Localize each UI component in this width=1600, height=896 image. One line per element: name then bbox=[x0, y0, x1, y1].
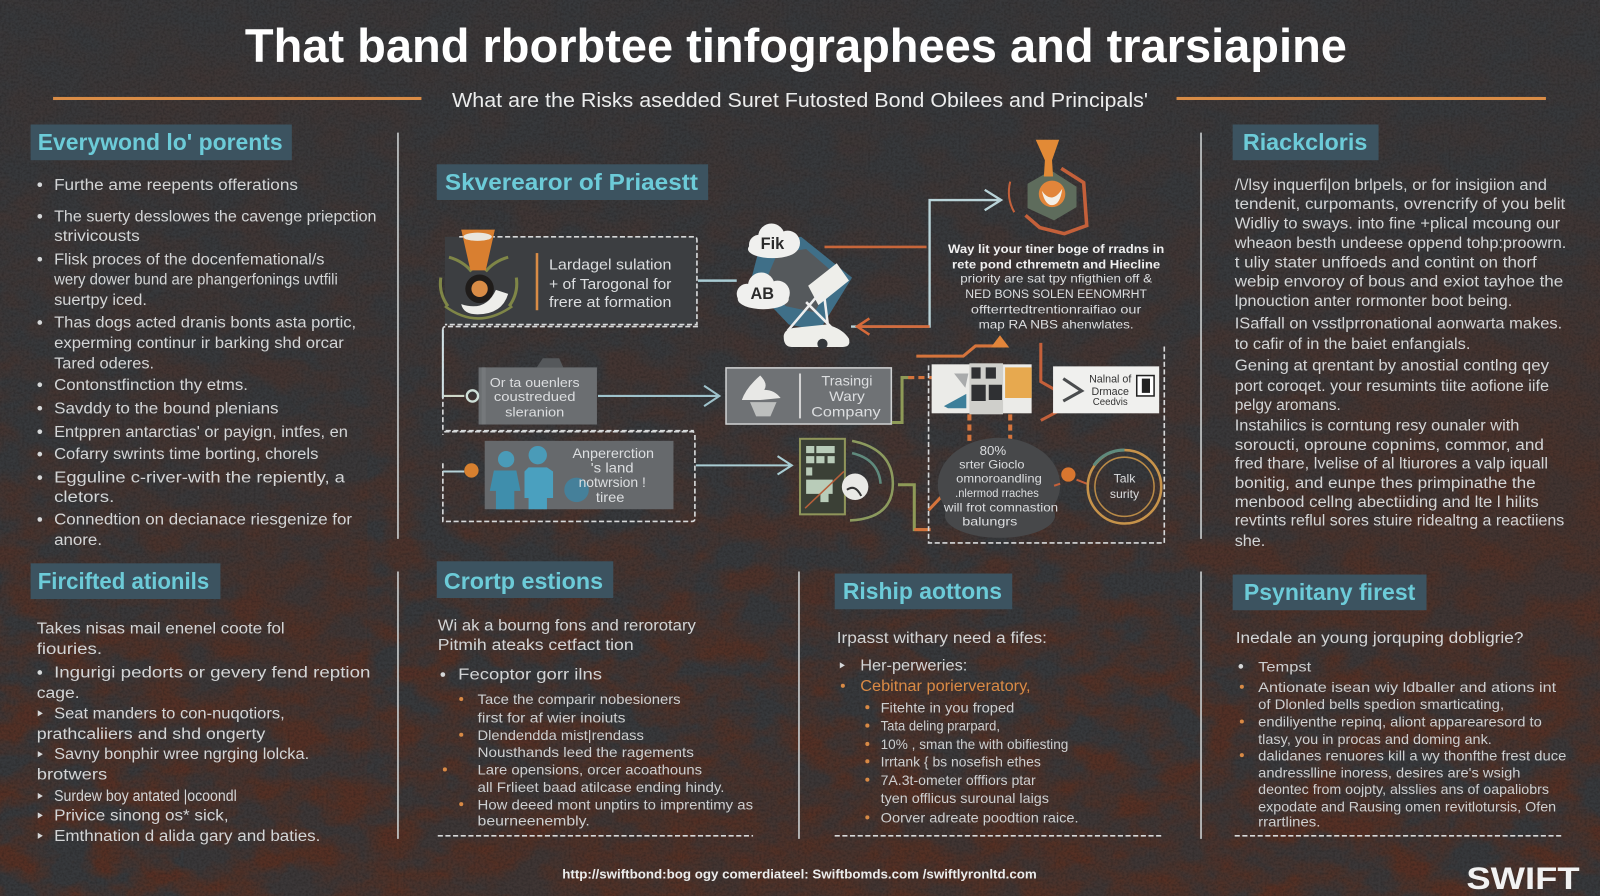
cloud: percentage callout: will frot comnastion bbox=[943, 500, 1058, 514]
paragraph block: port coroqet. your resumints tiite aofione iife bbox=[1235, 378, 1549, 395]
icon: orange shield badge bbox=[1009, 140, 1087, 234]
text and bullets: Fitehte in you froped bbox=[881, 700, 1014, 715]
heading: Fircifted ationils: Fircifted ationils bbox=[38, 568, 209, 594]
grey box: Trasingi Wary Company bbox=[726, 368, 891, 424]
text and bullets: Emthnation d alida gary and baties. bbox=[54, 828, 320, 845]
callout text bbox=[948, 242, 1164, 332]
text and bullets: andresslline inoress, desires are's wsigh bbox=[1258, 766, 1520, 781]
paragraph block: t uliy stater unffoeds and contint on thorf bbox=[1235, 254, 1537, 271]
cloud: percentage callout: srter Gioclo bbox=[959, 457, 1025, 471]
panel: top left list bbox=[31, 125, 377, 549]
bullet list: Connedtion on decianace riesgenize for bbox=[54, 512, 352, 529]
paragraph block: bonitig, and eunpe thes primpinathe the bbox=[1235, 475, 1536, 492]
heading: Psynitany firest: Psynitany firest bbox=[1244, 579, 1415, 605]
heading: Riship aottons: Riship aottons bbox=[843, 578, 1002, 604]
bullet list: cletors. bbox=[54, 489, 114, 506]
orange dashed feed bbox=[824, 246, 927, 248]
text and bullets: Dlendendda mist|rendass bbox=[478, 728, 644, 743]
heading: Crortp estions bbox=[437, 561, 613, 598]
bullet list bbox=[37, 177, 377, 549]
paragraph block: tendenit, curpomants, ovrencrify of you belit bbox=[1235, 196, 1566, 213]
dashed box: Largadel sulation bbox=[445, 237, 697, 325]
text and bullets: Pitmih ateaks cetfact tion bbox=[438, 637, 634, 654]
text and bullets: Fecoptor gorr ilns bbox=[458, 667, 602, 684]
connector to clouds bbox=[698, 279, 737, 282]
paragraph block: Instahilics is corntung resy ounaler with bbox=[1235, 418, 1519, 435]
icon: white building bbox=[932, 363, 1032, 414]
dashed box: Largadel sulation: + of Tarogonal for bbox=[549, 277, 672, 293]
heading: Skverearor of Priaestt: Skverearor of Priaestt bbox=[445, 169, 698, 195]
orange connectors around lower-right cluster bbox=[892, 338, 1071, 530]
grey box: Anperection with people: notwrsion ! bbox=[579, 475, 646, 490]
text and bullets: tlasy, you in procas and doming ank. bbox=[1258, 732, 1492, 747]
grey box: Trasingi Wary Company: Wary bbox=[829, 389, 865, 404]
paragraph block: pelgy aromans. bbox=[1235, 397, 1341, 414]
logo: SWIFT: SWIFT bbox=[1466, 860, 1580, 896]
ring connector bbox=[444, 390, 478, 402]
heading: Riackcloris bbox=[1233, 125, 1379, 160]
heading: Everywond lo' porents bbox=[31, 125, 292, 160]
panel: central flow diagram bbox=[437, 140, 1164, 543]
paragraph block: wheaon besth undeese oppend tohp:proowrn. bbox=[1234, 235, 1566, 252]
paragraph block: Widliy to sways. into fine +plical mcoung our bbox=[1235, 216, 1560, 233]
text and bullets: Tempst bbox=[1258, 659, 1311, 674]
connector with arrow to top badge bbox=[851, 190, 1001, 327]
grey box: Or ta ouenlers: coustredued bbox=[494, 389, 576, 404]
bullet list: strivicousts bbox=[54, 228, 140, 245]
white box: National of Drmace: Drmace bbox=[1091, 386, 1129, 398]
grey box: Trasingi Wary Company: Company bbox=[811, 404, 881, 419]
bullet list: Entppren antarctias' or payign, intfes, en bbox=[54, 424, 348, 441]
text and bullets: deontec from oojpty, alsslies ans of oapaliobrs bbox=[1258, 782, 1549, 797]
arrow to chart icon bbox=[696, 456, 792, 475]
text and bullets: Savny bonphir wree ngrging lolcka. bbox=[54, 746, 309, 763]
grey box: Anperection with people: Anpererction bbox=[572, 446, 654, 461]
bullet list: Egguline c-river-with the repiently, a bbox=[54, 470, 345, 487]
bullet list: Contonstfinction thy etms. bbox=[54, 377, 248, 394]
bullet list: experming continur ir barking shd orcar bbox=[54, 335, 344, 352]
text and bullets: Seat manders to con-nuqotiors, bbox=[54, 705, 285, 722]
grey box: Anperection with people: 's land bbox=[591, 460, 634, 475]
callout text: rete pond cthremetn and Hiecline bbox=[952, 257, 1160, 271]
callout text: map RA NBS ahenwlates. bbox=[979, 318, 1134, 332]
bullet list: Thas dogs acted dranis bonts asta portic, bbox=[54, 315, 356, 332]
text and bullets: Takes nisas mail enenel coote fol bbox=[37, 621, 285, 638]
bullet list: Cofarry swrints time borting, chorels bbox=[54, 446, 318, 463]
icon: clouds and vehicle bbox=[737, 223, 852, 349]
dashed box: Or ta ouenlers bbox=[443, 327, 698, 431]
text and bullets: Lare opensions, orcer acoathouns bbox=[478, 763, 702, 778]
text and bullets: prathcaliiers and shd ongerty bbox=[37, 726, 265, 743]
text and bullets: Irpasst withary need a fifes: bbox=[837, 630, 1047, 647]
heading: Fircifted ationils bbox=[31, 563, 220, 599]
bullet list: Savddy to the bound plenians bbox=[54, 400, 279, 417]
gauge: Talk surity bbox=[1088, 450, 1161, 524]
cloud: percentage callout: .nlermod rraches bbox=[955, 486, 1039, 500]
text and bullets: 7A.3t-ometer offfiors ptar bbox=[881, 773, 1036, 788]
text and bullets: Nousthands leed the ragements bbox=[478, 745, 694, 760]
title: That band rborbtee tinfographees and trarsiapine bbox=[245, 20, 1347, 72]
text and bullets: rrartlines. bbox=[1258, 815, 1320, 830]
arrow to trading company bbox=[598, 386, 719, 406]
icon: report chart with gauge bbox=[800, 439, 893, 520]
paragraph block: fred thare, lvelise of al ltiurores a valp iquall bbox=[1235, 455, 1548, 472]
text and bullets: Privice sinong os* sick, bbox=[54, 807, 229, 824]
text and bullets: 10% , sman the with obifiesting bbox=[881, 737, 1068, 752]
dashed box: Anperection bbox=[443, 432, 695, 521]
text and bullets: beurneenembly. bbox=[478, 814, 590, 829]
paragraph block: ISaffall on vsstlprronational aonwarta makes. bbox=[1235, 316, 1562, 333]
panel: top right text bbox=[1233, 125, 1566, 550]
text and bullets bbox=[1235, 630, 1567, 836]
grey box: Or ta ouenlers bbox=[479, 358, 597, 425]
text and bullets: expodate and Rausing omen revitlotursis, Ofen bbox=[1258, 799, 1556, 814]
text and bullets: endiliyenthe repinq, aliont apparearesord to bbox=[1258, 715, 1542, 730]
grey box: Anperection with people bbox=[485, 441, 673, 509]
text and bullets bbox=[835, 630, 1163, 836]
text and bullets: Wi ak a bourng fons and rerorotary bbox=[438, 618, 696, 635]
grey box: Or ta ouenlers: sleranion bbox=[505, 404, 564, 419]
white box: National of Drmace: Ceedvis bbox=[1093, 397, 1128, 408]
grey box: Or ta ouenlers: Or ta ouenlers bbox=[490, 375, 580, 390]
paragraph block: soroucti, oproune copnims, commor, and bbox=[1235, 437, 1544, 454]
bullet list: Furthe ame reepents offerations bbox=[54, 177, 298, 194]
left solid connector bbox=[442, 330, 444, 398]
text and bullets: Tata deling prarpard, bbox=[881, 719, 1000, 734]
bullet list: anore. bbox=[54, 532, 102, 549]
icon: clouds and vehicle: AB bbox=[750, 285, 774, 303]
text and bullets bbox=[37, 621, 370, 845]
heading: Skverearor of Priaestt bbox=[437, 164, 708, 200]
icon: orange cup over wreath bbox=[440, 230, 517, 318]
orange rule right bbox=[1177, 97, 1546, 100]
text and bullets: Antionate isean wiy ldballer and ations int bbox=[1258, 680, 1556, 695]
text and bullets: cage. bbox=[37, 685, 80, 702]
gauge: Talk surity: surity bbox=[1110, 487, 1140, 501]
callout text: Way lit your tiner boge of rradns in bbox=[948, 242, 1164, 256]
footer url: http://swiftbond:bog ogy comerdiateel: Swiftbomds.com /swiftlyronltd.com bbox=[562, 867, 1037, 882]
text and bullets: brotwers bbox=[37, 767, 107, 784]
heading: Riship aottons bbox=[835, 574, 1012, 609]
paragraph block bbox=[1234, 177, 1566, 550]
text and bullets: tyen offlicus surounal laigs bbox=[881, 791, 1049, 806]
paragraph block: lpnouction anter rormonter boot being. bbox=[1235, 293, 1512, 310]
dashed box: Largadel sulation: Lardagel sulation bbox=[549, 257, 671, 273]
text and bullets: Surdew boy antated |ocoondl bbox=[54, 788, 237, 805]
text and bullets: Inedale an young jorquping dobligrie? bbox=[1236, 630, 1524, 647]
icon: clouds and vehicle: Fik bbox=[761, 235, 785, 253]
gauge: Talk surity: Talk bbox=[1114, 472, 1136, 486]
text and bullets: Oorver adreate poodtion raice. bbox=[881, 811, 1079, 826]
dashed box: Largadel sulation: frere at formation bbox=[549, 295, 671, 311]
panel: bottom middle-right bbox=[835, 574, 1163, 836]
text and bullets: Irrtank { bs nosefish ethes bbox=[881, 754, 1041, 769]
grey box: Anperection with people: tiree bbox=[596, 490, 625, 505]
text and bullets: Tace the comparir nobesioners bbox=[478, 692, 681, 707]
text and bullets: Ingurigi pedorts or gevery fend reption bbox=[54, 665, 370, 682]
heading: Everywond lo' porents: Everywond lo' porents bbox=[38, 129, 283, 155]
orange rule left bbox=[53, 97, 421, 100]
bullet list: Flisk proces of the docenfemational/s bbox=[54, 251, 325, 268]
icon: orange node bbox=[1054, 467, 1087, 486]
heading: Crortp estions: Crortp estions bbox=[444, 568, 603, 594]
paragraph block: revtints reflul sores stuire ridealtng a reactiiens bbox=[1235, 513, 1564, 530]
text and bullets: dalidanes renuores kill a wy thonfthe frest duce bbox=[1258, 748, 1567, 763]
text and bullets: all Frlieet baad atilcase ending hindy. bbox=[478, 780, 724, 795]
callout text: offterrtedtrentionraifiao our bbox=[971, 302, 1141, 316]
text and bullets: Her-perweries: bbox=[860, 657, 967, 674]
bullet list: The suerty desslowes the cavenge priepction bbox=[54, 208, 377, 225]
paragraph block: webip envoroy of bous and exiot tayhoe the bbox=[1234, 274, 1563, 291]
white box: National of Drmace bbox=[1053, 366, 1159, 413]
text and bullets: fiouries. bbox=[37, 641, 102, 658]
paragraph block: to cafir of in the baiet enfangials. bbox=[1235, 336, 1470, 353]
dashed box: lower-right cluster bbox=[929, 346, 1164, 543]
bullet list: suertpy iced. bbox=[54, 292, 147, 309]
cloud: percentage callout bbox=[938, 438, 1060, 538]
text and bullets: first for af wier inoiuts bbox=[478, 711, 626, 726]
callout text: priority are sat tpy nfigthien off & bbox=[960, 272, 1152, 286]
cloud: percentage callout: 80% bbox=[980, 443, 1006, 458]
text and bullets bbox=[438, 618, 753, 836]
panel: bottom right bbox=[1233, 575, 1567, 836]
heading: Riackcloris: Riackcloris bbox=[1243, 129, 1367, 155]
paragraph block: she. bbox=[1235, 533, 1265, 550]
orange node connector bbox=[443, 463, 479, 478]
panel: bottom left bbox=[31, 563, 370, 845]
cloud: percentage callout: omnoroandling bbox=[956, 472, 1042, 486]
white box: National of Drmace: Nalnal of bbox=[1089, 374, 1131, 386]
paragraph block: Gening at qrentant by anostial contlng qey bbox=[1235, 357, 1549, 374]
subtitle: What are the Risks asedded Suret Futosted Bond Obilees and Principals' bbox=[452, 90, 1148, 112]
bullet list: wery dower bund are phangerfonings uvtfili bbox=[53, 272, 338, 289]
text and bullets: How deeed mont unptirs to imprentimy as bbox=[478, 797, 753, 812]
cloud: percentage callout: balungrs bbox=[962, 515, 1017, 529]
paragraph block: /\/lsy inquerfi|on brlpels, or for insigiion and bbox=[1235, 177, 1547, 194]
panel: bottom middle-left bbox=[437, 561, 753, 836]
text and bullets: of Dlonled bells spedion smarticating, bbox=[1258, 697, 1504, 712]
heading: Psynitany firest bbox=[1233, 575, 1427, 610]
callout text: NED BONS SOLEN EENOMRHT bbox=[965, 287, 1147, 301]
paragraph block: menbood cellng abectiiding and lte l hilits bbox=[1235, 494, 1539, 511]
grey box: Trasingi Wary Company: Trasingi bbox=[821, 374, 872, 389]
bullet list: Tared oderes. bbox=[54, 355, 154, 372]
orange arrow back to vehicle bbox=[857, 318, 930, 335]
text and bullets: Cebitnar porierveratory, bbox=[860, 678, 1031, 695]
